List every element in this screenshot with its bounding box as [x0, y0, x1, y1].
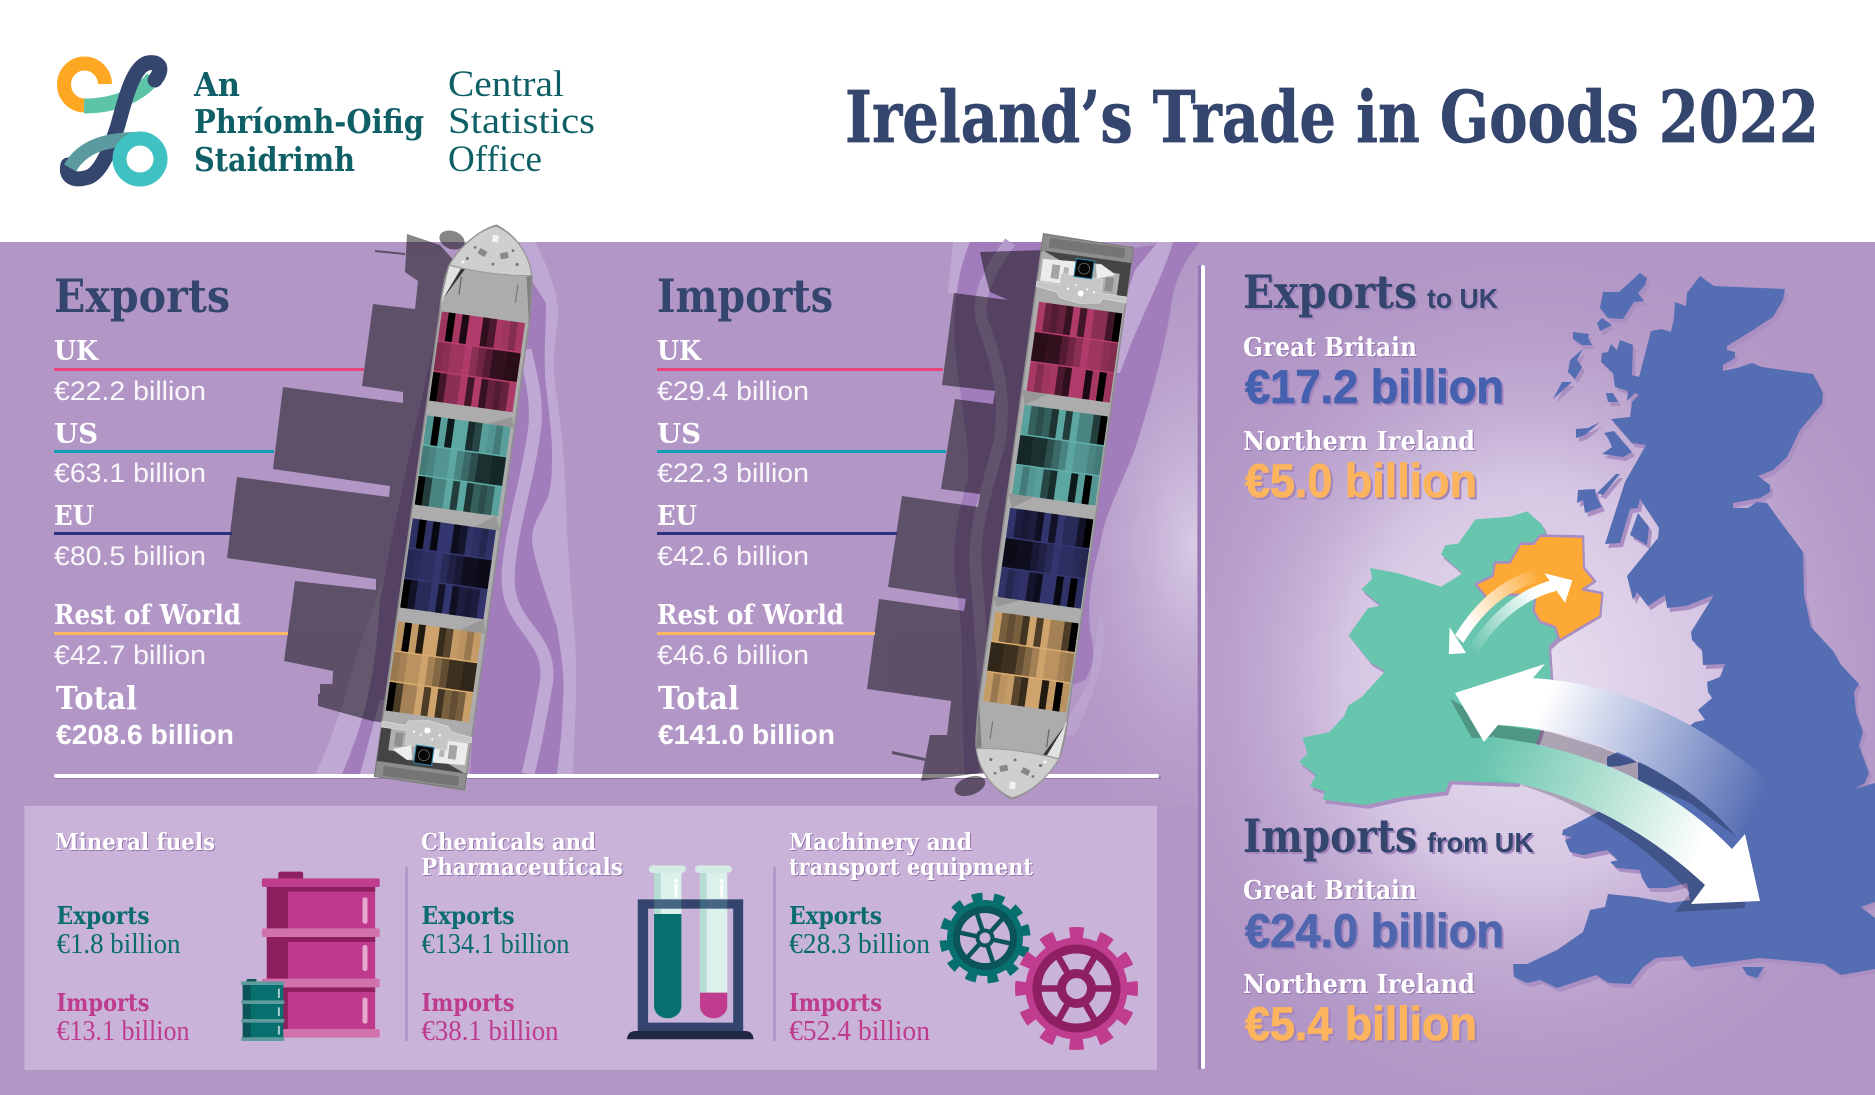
imports from UK text: €24.0 billion — [1245, 904, 1504, 957]
exports to UK text: Northern Ireland — [1243, 427, 1475, 457]
machinery text: transport equipment — [789, 854, 1033, 881]
export container ship — [374, 219, 543, 790]
machinery text: €52.4 billion — [789, 1016, 930, 1047]
imports breakdown: €42.6 billion — [657, 541, 809, 571]
imports from UK text: Great Britain — [1243, 876, 1417, 906]
arrows between Ireland and Northern Ireland — [1449, 573, 1572, 654]
chemicals text: €134.1 billion — [422, 929, 570, 960]
exports breakdown: €208.6 billion — [56, 719, 234, 750]
exports breakdown: US — [54, 419, 98, 450]
imports breakdown: UK — [657, 336, 702, 367]
exports breakdown: Exports — [54, 269, 230, 323]
exports breakdown: EU — [54, 501, 94, 532]
CSO logo: An — [193, 65, 240, 104]
mineral fuels text: €1.8 billion — [56, 929, 180, 960]
imports from UK text: from UK — [1427, 827, 1534, 858]
arrow: imports from Great Britain — [1440, 737, 1760, 904]
exports breakdown — [54, 269, 364, 750]
imports breakdown: Total — [658, 679, 739, 717]
imports breakdown: Rest of World — [657, 600, 844, 631]
machinery text: Machinery and — [789, 829, 972, 856]
exports to UK text — [1243, 265, 1504, 507]
map of Ireland — [1299, 511, 1603, 809]
icon: test tubes — [627, 865, 754, 1039]
shadow of export arrow — [1450, 699, 1737, 837]
chemicals text: €38.1 billion — [422, 1016, 558, 1047]
imports from UK text — [1243, 809, 1534, 1050]
machinery text: €28.3 billion — [789, 929, 930, 960]
machinery text: Imports — [789, 988, 882, 1017]
exports breakdown: UK — [54, 336, 99, 367]
export ship shadow — [227, 227, 480, 730]
imports breakdown: US — [657, 419, 701, 450]
mineral fuels text: Exports — [56, 901, 150, 930]
map of Great Britain — [1513, 273, 1875, 992]
exports breakdown: Total — [56, 679, 137, 717]
mineral fuels text: Imports — [56, 988, 150, 1017]
imports from UK text: Northern Ireland — [1243, 970, 1475, 1000]
chemicals text: Imports — [422, 988, 514, 1017]
import ship wake — [948, 242, 1200, 775]
exports breakdown: €63.1 billion — [54, 458, 206, 488]
exports breakdown: €22.2 billion — [54, 376, 206, 406]
imports breakdown: €141.0 billion — [658, 719, 835, 750]
imports from UK text: Imports — [1243, 809, 1417, 863]
mineral fuels text: Mineral fuels — [55, 829, 215, 856]
divider line under ship section — [54, 774, 1161, 779]
machinery text — [789, 829, 1033, 1047]
mineral fuels text: €13.1 billion — [56, 1016, 190, 1047]
vertical divider — [1198, 265, 1205, 1069]
chemicals text: Exports — [422, 901, 514, 930]
exports to UK text: €5.0 billion — [1245, 454, 1477, 507]
imports breakdown: €46.6 billion — [657, 640, 809, 670]
CSO logo: Phríomh-Oifig — [194, 102, 424, 141]
imports breakdown: €22.3 billion — [657, 458, 809, 488]
shadow of import arrow — [1517, 784, 1745, 912]
panel: commodity groups — [24, 806, 1157, 1070]
CSO logo — [64, 63, 595, 180]
chemicals text — [421, 829, 623, 1047]
arrow: exports to Great Britain — [1455, 664, 1770, 837]
icon: oil barrels — [241, 872, 380, 1041]
imports breakdown: €29.4 billion — [657, 376, 809, 406]
icon: teal gear — [936, 889, 1034, 987]
purple main background — [0, 242, 1875, 1095]
Northern Ireland — [1476, 536, 1603, 641]
CSO logo: Office — [448, 139, 542, 180]
chemicals text: Pharmaceuticals — [421, 854, 623, 881]
chemicals text: Chemicals and — [421, 829, 596, 856]
header background — [0, 0, 1875, 242]
exports to UK text: Great Britain — [1243, 333, 1417, 363]
imports breakdown: EU — [657, 501, 697, 532]
imports from UK text: €5.4 billion — [1245, 997, 1477, 1050]
exports breakdown: €80.5 billion — [54, 541, 206, 571]
background glow behind imports ship — [900, 242, 1197, 806]
machinery text: Exports — [789, 901, 882, 930]
CSO logo: Central — [448, 64, 564, 105]
CSO logo: Staidrimh — [194, 140, 355, 179]
export ship wake — [315, 242, 576, 774]
exports to UK text: €17.2 billion — [1245, 360, 1504, 413]
CSO logo: Statistics — [448, 101, 595, 142]
exports breakdown: €42.7 billion — [54, 640, 206, 670]
import ship shadow — [867, 250, 1060, 800]
exports to UK text: Exports — [1243, 265, 1417, 319]
import container ship — [965, 234, 1134, 805]
mineral fuels text — [55, 829, 215, 1047]
imports breakdown — [657, 269, 946, 750]
exports breakdown: Rest of World — [54, 600, 241, 631]
exports to UK text: to UK — [1427, 283, 1498, 314]
icon: pink gear — [1020, 932, 1132, 1044]
imports breakdown: Imports — [657, 269, 833, 323]
background glow behind map — [1205, 242, 1875, 1095]
